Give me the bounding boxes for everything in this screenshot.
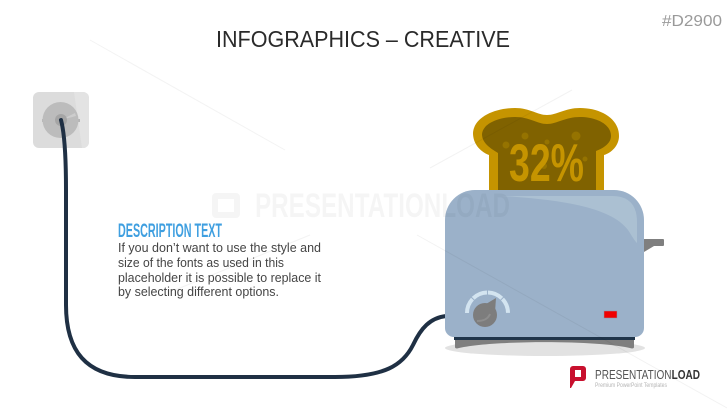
text block: description xyxy=(118,221,321,299)
percentage label: 32% xyxy=(509,134,584,193)
toast bubbles xyxy=(502,132,588,169)
toaster highlight xyxy=(502,196,637,243)
description heading: DESCRIPTION TEXT xyxy=(118,221,222,242)
toaster base xyxy=(454,336,635,348)
toast crust xyxy=(473,108,619,192)
title: INFOGRAPHICS – CREATIVE xyxy=(216,26,510,52)
toaster handle xyxy=(642,239,664,252)
description body: by selecting different options. xyxy=(118,284,279,299)
description body: size of the fonts as used in this xyxy=(118,255,284,270)
logo wordmark: PRESENTATIONLOAD xyxy=(595,367,700,382)
toast crumb xyxy=(482,117,611,192)
dial knob xyxy=(473,303,497,327)
toast xyxy=(473,108,619,193)
logo tagline: Premium PowerPoint Templates xyxy=(595,383,667,389)
logo: PresentationLoad xyxy=(570,366,700,389)
watermark xyxy=(212,187,510,225)
indicator light xyxy=(604,311,617,318)
toaster body xyxy=(445,190,644,337)
shadow under toaster xyxy=(445,340,645,356)
description body: placeholder it is possible to replace it xyxy=(118,270,321,285)
icon: wall socket xyxy=(33,92,89,148)
temperature dial xyxy=(467,292,508,327)
description body: If you don’t want to use the style and xyxy=(118,240,321,255)
logo mark xyxy=(570,366,586,388)
power cable xyxy=(61,120,446,377)
description body xyxy=(118,240,321,299)
dial scale xyxy=(467,292,508,313)
product code: #D2900 xyxy=(662,13,722,30)
watermark: PRESENTATIONLOAD xyxy=(255,187,510,225)
